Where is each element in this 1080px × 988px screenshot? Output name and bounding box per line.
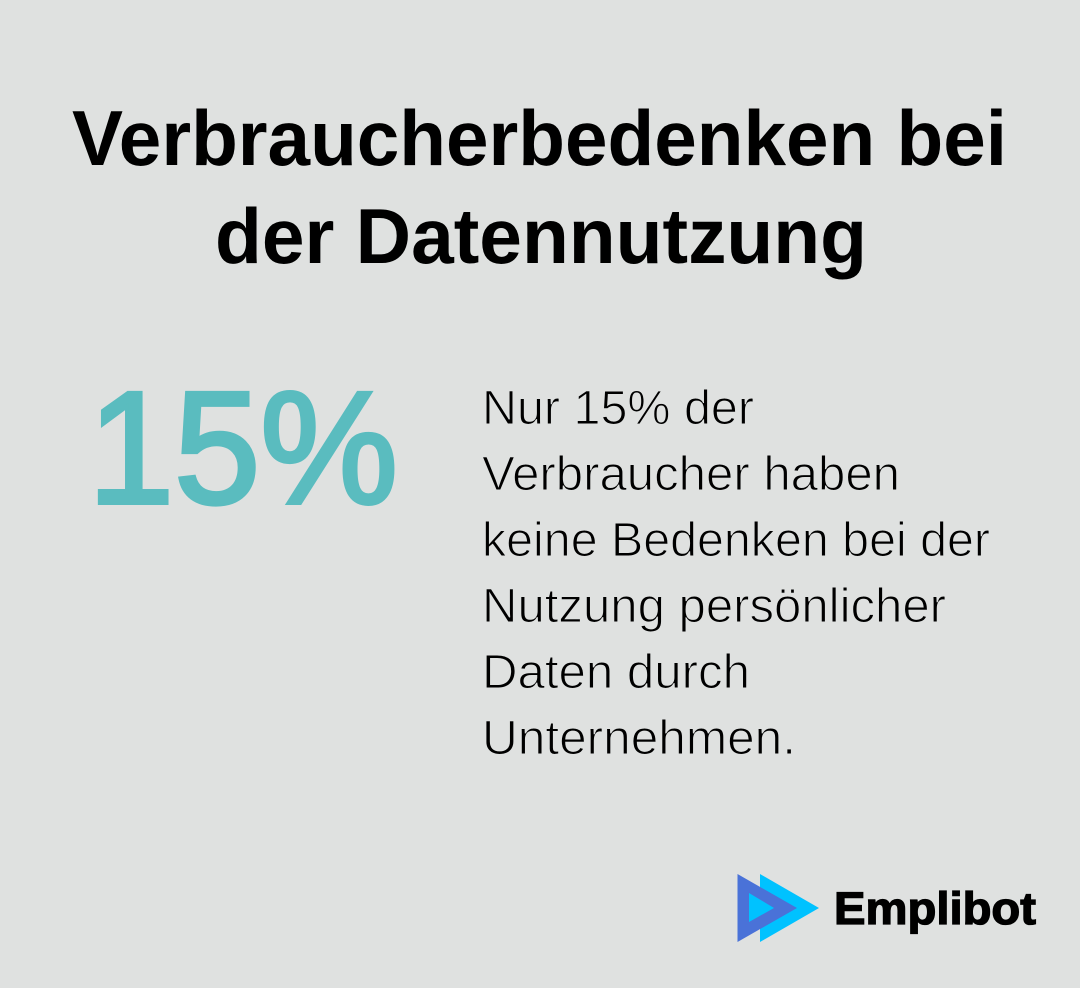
- logo wordmark: Emplibot: [834, 883, 1036, 934]
- description text: Verbraucher haben: [482, 448, 900, 501]
- title: der Datennutzung: [215, 192, 867, 280]
- title: [72, 94, 1007, 280]
- description text: Nur 15% der: [482, 382, 754, 435]
- description text: keine Bedenken bei der: [482, 514, 990, 567]
- title: Verbraucherbedenken bei: [72, 94, 1007, 182]
- description text: Nutzung persönlicher: [482, 580, 946, 633]
- icon: play triangles: [738, 874, 819, 942]
- big statistic: 15%: 15%: [88, 358, 398, 537]
- logo: Emplibot: [738, 874, 1036, 942]
- description text: [482, 382, 990, 765]
- description text: Unternehmen.: [482, 712, 796, 765]
- description text: Daten durch: [482, 646, 750, 699]
